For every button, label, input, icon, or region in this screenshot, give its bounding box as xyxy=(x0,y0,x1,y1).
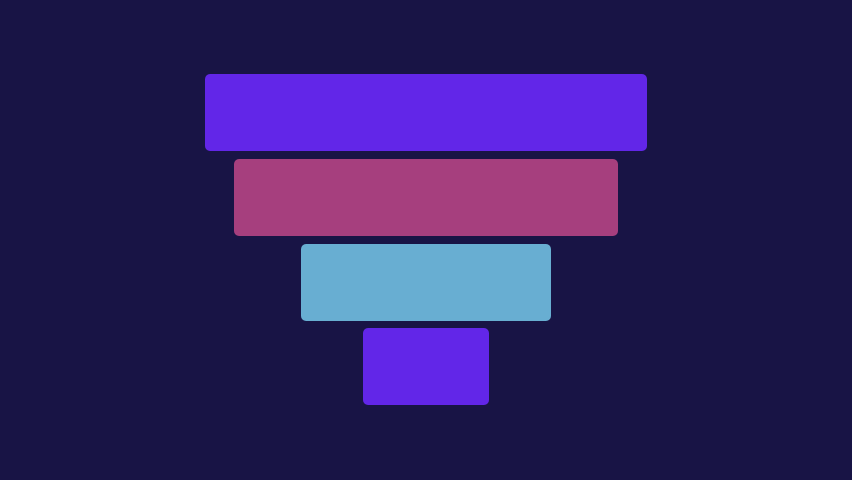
funnel chart xyxy=(205,74,647,405)
funnel stage 4 xyxy=(363,328,489,405)
funnel stage 2 xyxy=(234,159,618,236)
funnel stage 3 xyxy=(301,244,551,321)
funnel stage 1 xyxy=(205,74,647,151)
